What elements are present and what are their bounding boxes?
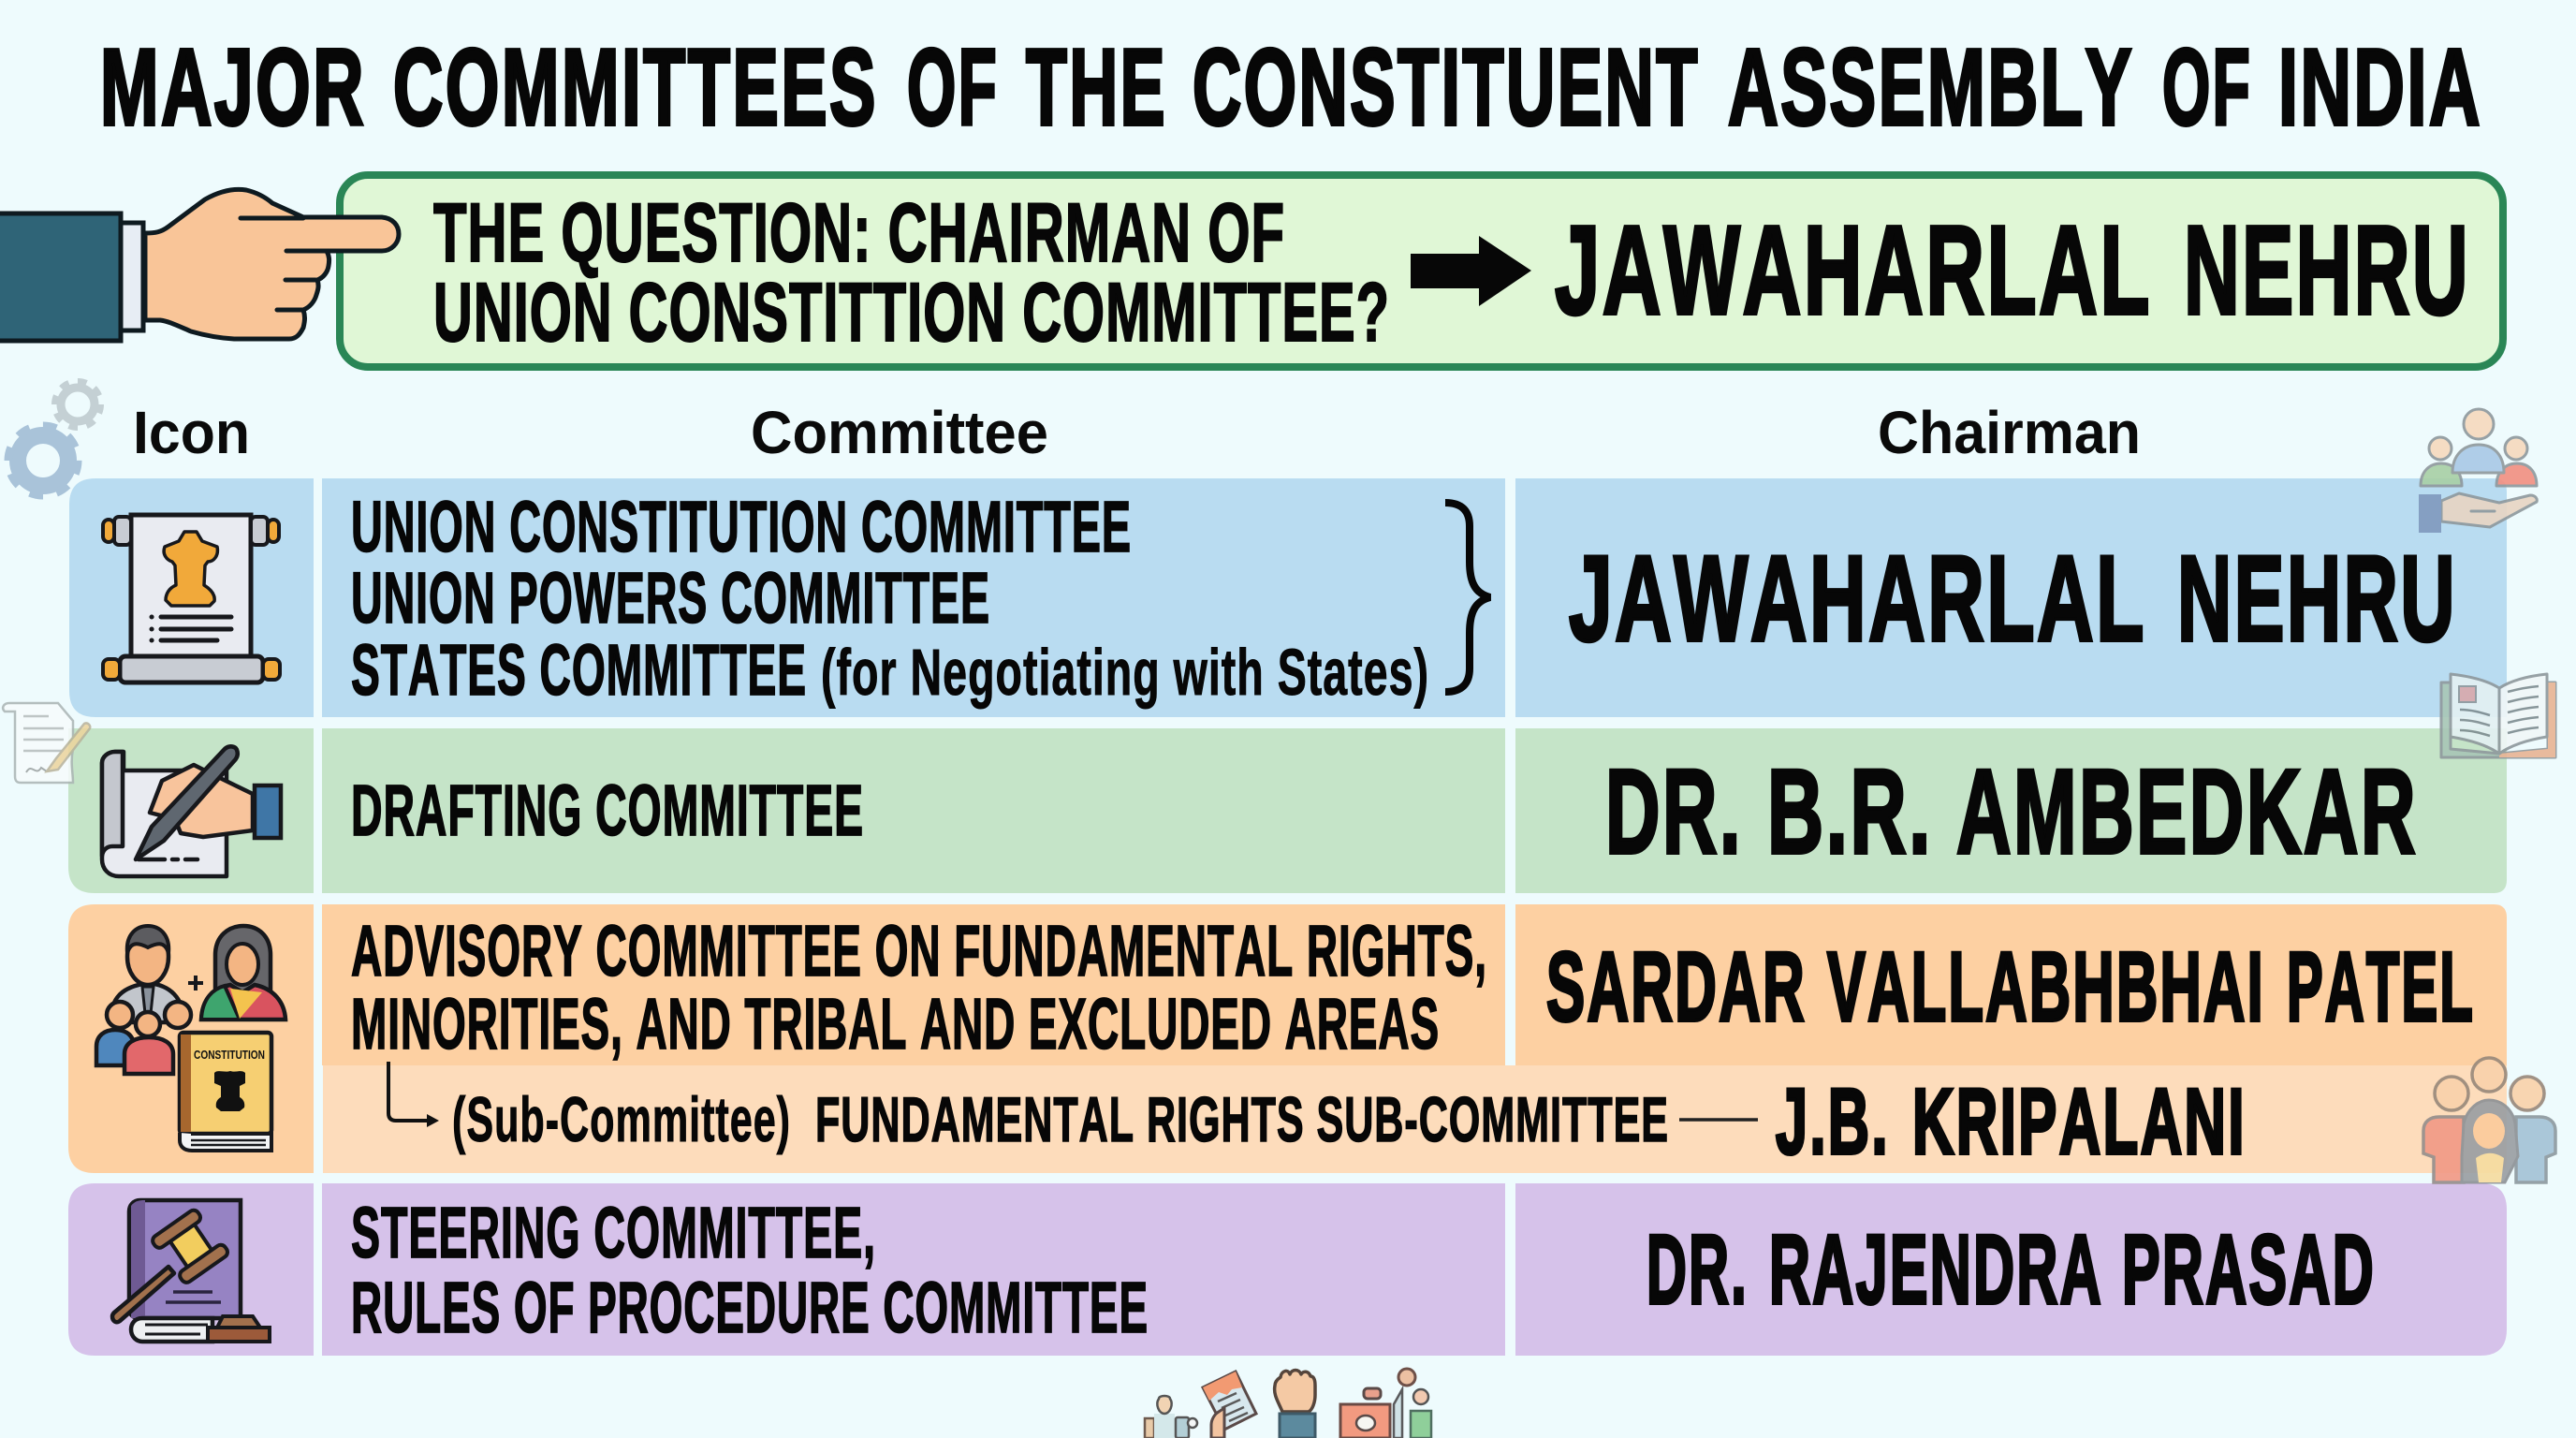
connector line (1679, 1118, 1758, 1122)
sub-committee chairman: Kripalani: J.B. (1776, 1069, 1890, 1173)
column headers: Icon (133, 399, 250, 466)
icons: bottom row (1145, 1369, 1431, 1438)
committee names (351, 1193, 1149, 1348)
title: OF (907, 26, 999, 148)
chairman: Patel: VALLABHBHAI (1827, 932, 2265, 1042)
title: CONSTITUENT (1193, 26, 1700, 148)
icon: hand signing document (102, 746, 281, 876)
title: OF (2162, 26, 2252, 148)
panel: row 4 Steering committee (68, 1183, 2507, 1356)
chairman: Jawaharlal Nehru: JAWAHARLAL (1569, 530, 2146, 667)
chairman: Patel: SARDAR (1546, 932, 1807, 1042)
committee name: MINORITIES, AND TRIBAL AND EXCLUDED AREAS (351, 984, 1440, 1064)
title (100, 26, 2482, 148)
icon: pointing hand (0, 189, 399, 341)
committee names: UNION POWERS COMMITTEE (351, 558, 990, 638)
column headers (133, 399, 2141, 466)
sub-committee chairman: Kripalani: KRIPALANI (1912, 1069, 2247, 1173)
committee name: DRAFTING COMMITTEE (351, 770, 864, 851)
icon: people and constitution book (96, 926, 285, 1151)
question text (433, 185, 1390, 359)
sub-committee label: FUNDAMENTAL RIGHTS SUB-COMMITTEE (815, 1084, 1669, 1155)
title: THE (1026, 26, 1167, 148)
committee names: (for Negotiating with States) (821, 636, 1429, 709)
icon: gavel and book (112, 1200, 270, 1342)
icon: people and constitution book: CONSTITUTION (194, 1049, 265, 1062)
panel: row 3 Advisory committee (68, 904, 2507, 1173)
panel: row 1 Nehru committees (69, 478, 2507, 717)
icon: open book (2441, 674, 2555, 757)
panel: row 2 Drafting committee (68, 728, 2507, 893)
committee names: STATES COMMITTEE (351, 630, 807, 711)
question text: THE QUESTION: CHAIRMAN OF (433, 185, 1285, 279)
chairman: Ambedkar (1605, 745, 2418, 879)
chairman: Patel (1546, 932, 2475, 1042)
committee names: STEERING COMMITTEE, (351, 1193, 876, 1273)
chairman: Rajendra Prasad: RAJENDRA (1769, 1215, 2103, 1325)
icon: group of people (2423, 1058, 2555, 1182)
committee names (351, 487, 1429, 711)
chairman: Rajendra Prasad: DR. (1647, 1215, 1749, 1325)
chairman: Ambedkar: B.R. (1767, 745, 1933, 879)
chairman: Ambedkar: DR. (1605, 745, 1743, 879)
column headers: Committee (751, 399, 1048, 466)
sub-committee band (323, 1065, 2507, 1173)
title: MAJOR (100, 26, 366, 148)
icon: people in hand (2419, 409, 2537, 533)
panel: question banner (340, 175, 2503, 367)
arrow: question to answer (1411, 236, 1531, 306)
sub-committee label: (Sub-Committee) (452, 1084, 791, 1155)
answer: Jawaharlal Nehru: JAWAHARLAL (1555, 199, 2152, 341)
icon: constitution scroll (103, 515, 280, 682)
title: ASSEMBLY (1728, 26, 2134, 148)
icon: gears (8, 381, 101, 495)
chairman: Rajendra Prasad: PRASAD (2122, 1215, 2376, 1325)
committee name (351, 911, 1487, 1064)
question text: UNION CONSTITTION COMMITTEE? (433, 265, 1390, 359)
committee name: ADVISORY COMMITTEE ON FUNDAMENTAL RIGHTS, (351, 911, 1487, 991)
committee names: UNION CONSTITUTION COMMITTEE (351, 487, 1132, 567)
committee names: RULES OF PROCEDURE COMMITTEE (351, 1268, 1149, 1348)
sub-committee label (452, 1084, 1669, 1155)
title: COMMITTEES (393, 26, 878, 148)
column headers: Chairman (1878, 399, 2141, 466)
sub-committee chairman: Kripalani (1776, 1069, 2247, 1173)
brace (1445, 503, 1490, 692)
icon: document and pencil (3, 703, 90, 783)
arrow: to sub-committee (388, 1062, 439, 1127)
